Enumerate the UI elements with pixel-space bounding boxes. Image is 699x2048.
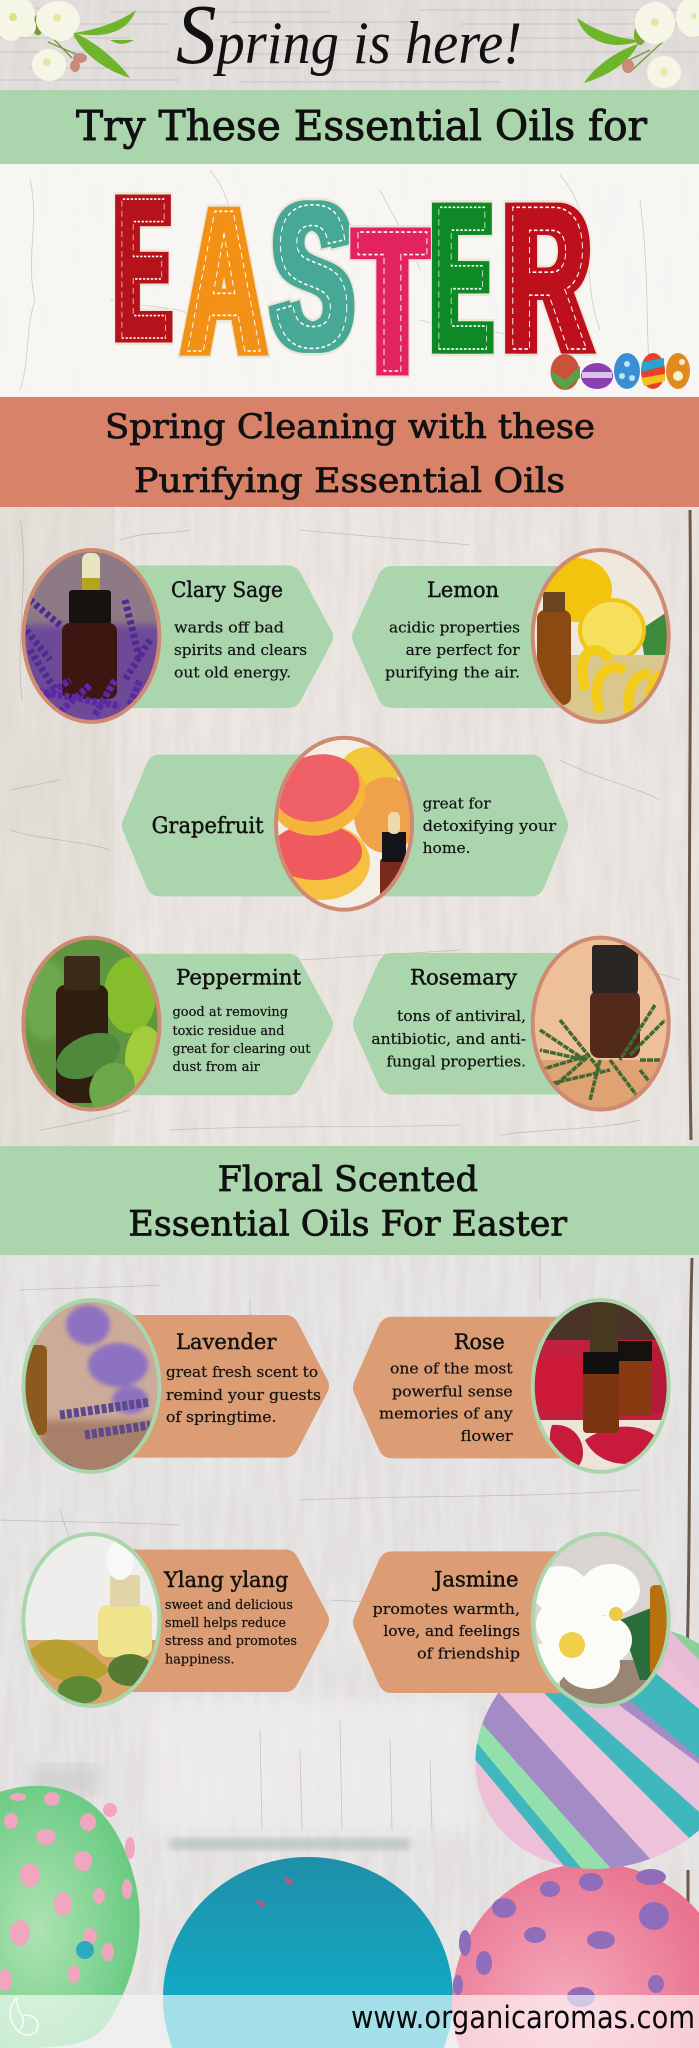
- photo: peppermint: [20, 935, 165, 1121]
- name: Rosemary: [410, 966, 517, 990]
- heading line 1: Spring Cleaning with these: [105, 407, 595, 447]
- name: Lemon: [427, 578, 499, 602]
- description: detoxifying your: [423, 817, 557, 835]
- description: spirits and clears: [174, 641, 307, 659]
- letter R red: R: [500, 164, 584, 393]
- description: [373, 1600, 520, 1663]
- description: wards off bad: [174, 619, 284, 637]
- letter S teal: S: [273, 164, 351, 391]
- decorative eggs at bottom: [0, 1631, 699, 2048]
- letter E red: E: [122, 156, 174, 382]
- blossom corner: left: [0, 0, 136, 81]
- letter T pink: T: [362, 189, 433, 414]
- photo: clary sage: [20, 545, 162, 725]
- letter E green: E: [428, 163, 485, 393]
- panel: ylang ylang: [20, 1530, 329, 1710]
- letter A orange: A: [190, 169, 268, 395]
- description: love, and feelings: [383, 1622, 520, 1640]
- letter A orange: A: [190, 169, 268, 395]
- description: memories of any: [379, 1405, 513, 1423]
- letter S teal: S: [278, 164, 356, 391]
- description: flower: [460, 1427, 514, 1445]
- letter R red: R: [505, 164, 589, 393]
- letter A orange: A: [180, 169, 258, 395]
- blossom corner: right: [577, 0, 699, 88]
- heading: try these: Try These Essential Oils for: [76, 102, 647, 150]
- letter T pink: T: [362, 189, 433, 414]
- description: sweet and delicious: [165, 1598, 293, 1613]
- icon: butterfly logo: [10, 1998, 38, 2035]
- green title band: [0, 90, 699, 164]
- letter R red: R: [510, 164, 594, 393]
- letter E green: E: [433, 163, 490, 393]
- name: Peppermint: [176, 966, 302, 990]
- letter E red: E: [117, 156, 169, 382]
- name: Rose: [454, 1330, 505, 1354]
- description: are perfect for: [406, 641, 521, 659]
- description: one of the most: [390, 1359, 513, 1377]
- description: tons of antiviral,: [397, 1007, 526, 1025]
- panel: grapefruit: [122, 733, 568, 915]
- letter T pink: T: [352, 189, 423, 414]
- description: good at removing: [172, 1005, 288, 1020]
- name: Grapefruit: [152, 814, 264, 839]
- panel: rosemary: [353, 935, 672, 1120]
- description: happiness.: [165, 1652, 234, 1668]
- letter R red: R: [500, 164, 584, 393]
- panel: peppermint: [20, 935, 333, 1121]
- photo: grapefruit: [274, 736, 414, 912]
- description: great for clearing out: [172, 1042, 311, 1057]
- name: Lavender: [176, 1330, 277, 1354]
- description: of springtime.: [166, 1408, 276, 1426]
- letter T pink: T: [352, 189, 423, 414]
- photo: lavender: [20, 1297, 162, 1480]
- description: [174, 619, 307, 681]
- photo: ylang ylang: [20, 1530, 162, 1710]
- description: [423, 795, 557, 857]
- photo: lemon: [530, 545, 672, 725]
- egg: green with pink dots: [0, 1786, 140, 2048]
- letter E green: E: [438, 163, 495, 393]
- description: [385, 619, 521, 681]
- description: home.: [423, 839, 471, 857]
- description: smell helps reduce: [165, 1616, 286, 1631]
- heading line 2: Purifying Essential Oils: [134, 461, 565, 501]
- letter T pink: T: [357, 189, 428, 414]
- photo: rose: [530, 1297, 680, 1480]
- description: dust from air: [172, 1060, 261, 1075]
- name: Ylang ylang: [163, 1568, 288, 1592]
- section banner: floral: [0, 1146, 699, 1255]
- small painted eggs: [550, 353, 690, 390]
- letter S teal: S: [268, 164, 346, 391]
- panel: jasmine: [353, 1530, 672, 1710]
- description: [379, 1359, 514, 1445]
- description: [172, 1005, 311, 1075]
- heading line 1: Floral Scented: [218, 1160, 478, 1200]
- egg: turquoise: [163, 1857, 453, 2048]
- description: great fresh scent to: [166, 1363, 318, 1381]
- letter S teal: S: [268, 164, 346, 391]
- description: of friendship: [417, 1645, 520, 1663]
- name: Jasmine: [432, 1568, 518, 1592]
- panel: lavender: [20, 1297, 329, 1480]
- description: promotes warmth,: [373, 1600, 520, 1618]
- letter A orange: A: [185, 169, 263, 395]
- letter A orange: A: [180, 169, 258, 395]
- footer band: [0, 1995, 699, 2048]
- letter R red: R: [510, 164, 594, 393]
- description: out old energy.: [174, 663, 291, 681]
- description: stress and promotes: [165, 1634, 297, 1649]
- description: [166, 1363, 321, 1426]
- description: [165, 1598, 297, 1668]
- name: Clary Sage: [171, 578, 283, 602]
- description: antibiotic, and anti-: [371, 1030, 526, 1048]
- description: powerful sense: [392, 1382, 513, 1400]
- description: remind your guests: [166, 1386, 321, 1404]
- description: fungal properties.: [386, 1052, 526, 1070]
- description: acidic properties: [389, 619, 520, 637]
- panel: lemon: [352, 545, 672, 725]
- description: great for: [423, 795, 491, 813]
- panel: rose: [353, 1297, 680, 1480]
- description: purifying the air.: [385, 663, 520, 681]
- description: toxic residue and: [172, 1024, 284, 1039]
- egg: pink with purple dots: [452, 1863, 699, 2048]
- description: [371, 1007, 526, 1070]
- letter E red: E: [122, 156, 174, 382]
- section banner: spring cleaning: [0, 397, 699, 507]
- letter E red: E: [112, 156, 164, 382]
- photo: jasmine: [523, 1530, 672, 1710]
- letter E green: E: [438, 163, 495, 393]
- panel: clary sage: [20, 545, 333, 725]
- letter S teal: S: [278, 164, 356, 391]
- photo: rosemary: [530, 935, 672, 1120]
- letter E red: E: [112, 156, 164, 382]
- heading line 2: Essential Oils For Easter: [128, 1205, 567, 1245]
- letter E green: E: [428, 163, 485, 393]
- egg: painted stripes: [475, 1631, 699, 1869]
- EASTER stitched lettering: [112, 156, 594, 414]
